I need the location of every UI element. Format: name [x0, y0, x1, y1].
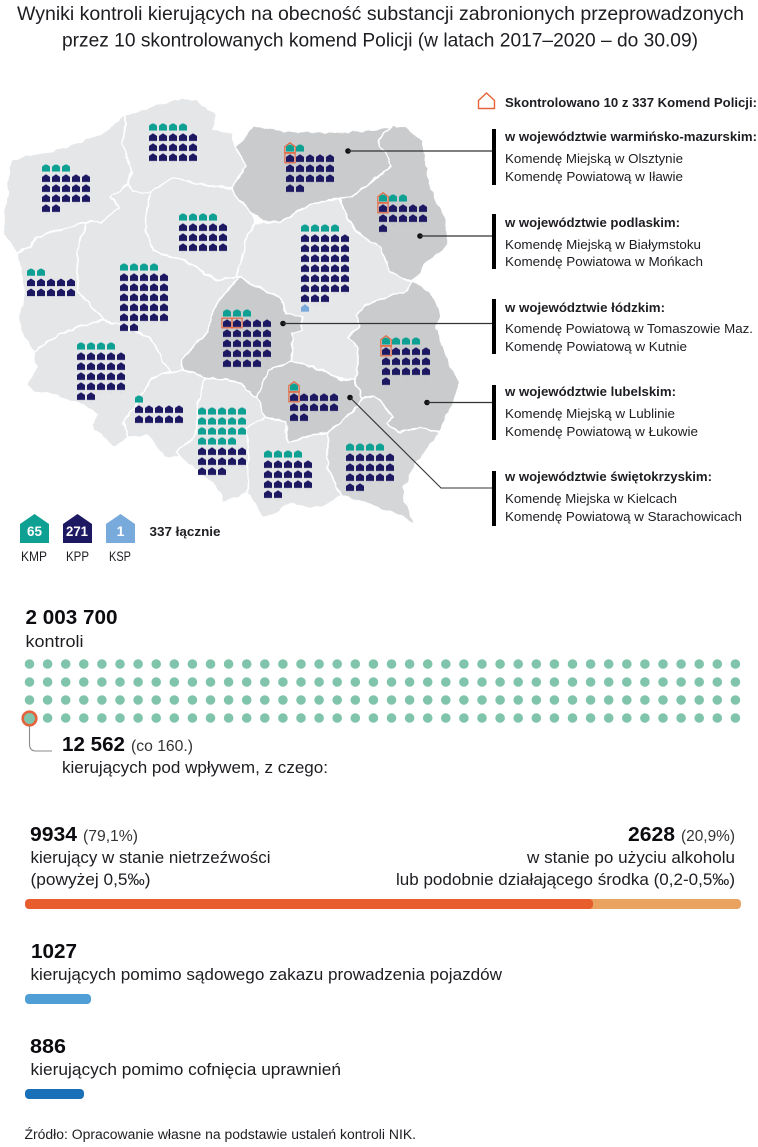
map of Poland: [3, 98, 460, 526]
region: opolskie: [123, 370, 207, 457]
icons: lubelskie: [381, 336, 432, 387]
legend: KSP: [106, 514, 135, 564]
stat: total checks: 2 003 700: [26, 607, 118, 629]
icons: podlaskie: [378, 193, 429, 234]
legend: KSP: 1: [117, 523, 125, 539]
stat: 2628: (20,9%): [681, 828, 735, 845]
icons: zachodniopomorskie: [42, 164, 92, 214]
region: podkarpackie: [328, 395, 440, 526]
controlled units heading: [478, 93, 757, 110]
stat: 1027: kierujących pomimo sądowego zakazu prowadzenia pojazdów: [30, 966, 502, 984]
stat: 1027: 1027: [31, 941, 77, 963]
legend: KPP: [63, 514, 92, 564]
panel: świętokrzyskie: [492, 470, 742, 526]
legend: total: 337 łącznie: [150, 524, 220, 539]
connector: podlaskie: [417, 233, 493, 239]
panel: łódzkie: Komendę Powiatową w Kutnie: [505, 340, 687, 354]
icons: łódzkie: [222, 309, 273, 369]
icons: świętokrzyskie: [289, 382, 340, 423]
bar: 1027: [25, 994, 91, 1004]
stat: 9934: 9934: [30, 824, 78, 846]
stat: drivers under influence: (co 160.): [131, 738, 193, 755]
icons: dolnośląskie: [77, 342, 127, 402]
panel: lubelskie: Komendę Powiatową w Łukowie: [505, 425, 698, 439]
panel: świętokrzyskie: Komendę Miejska w Kielcach: [505, 492, 677, 506]
panel: świętokrzyskie: w województwie świętokrzyskim:: [504, 470, 712, 484]
panel: warmińsko-mazurskie: Komendę Miejską w Olsztynie: [505, 152, 683, 166]
region: lubelskie: [348, 282, 460, 433]
stat: 1027: [30, 941, 502, 984]
panel: podlaskie: w województwie podlaskim:: [504, 216, 680, 230]
region: podlaskie: [340, 125, 448, 282]
icons: mazowieckie: [301, 224, 351, 314]
icon: orange house outline: [478, 93, 494, 108]
region: dolnośląskie: [25, 320, 170, 448]
map legend: [20, 514, 220, 564]
stat: 2628: w stanie po użyciu alkoholu: [526, 849, 735, 867]
bar: split 79.1 / 20.9: [25, 899, 741, 909]
panel: warmińsko-mazurskie: w województwie warmińsko-mazurskim:: [504, 130, 757, 144]
stat: drivers under influence: [62, 734, 328, 777]
panel: łódzkie: Komendę Powiatową w Tomaszowie Maz.: [505, 322, 753, 336]
stat: drivers under influence: kierujących pod wpływem, z czego:: [62, 759, 328, 777]
panel: podlaskie: Komendę Powiatowa w Mońkach: [505, 255, 703, 269]
panel: lubelskie: Komendę Miejską w Lublinie: [505, 407, 675, 421]
region: mazowieckie: [235, 198, 413, 380]
icons: wielkopolskie: [120, 263, 170, 333]
panel: łódzkie: w województwie łódzkim:: [504, 301, 665, 315]
region: warmińsko-mazurskie: [232, 127, 392, 222]
stat: 9934: [30, 824, 270, 889]
title: [17, 3, 744, 52]
stat: 2628: lub podobnie działającego środka (0,2-0,5‰): [396, 871, 735, 889]
region: zachodniopomorskie: [3, 115, 132, 253]
stat: 886: kierujących pomimo cofnięcia uprawnień: [30, 1061, 341, 1079]
stat: 886: 886: [30, 1036, 66, 1058]
panel: warmińsko-mazurskie: Komendę Powiatową w Iławie: [505, 170, 683, 184]
stat: total checks: kontroli: [26, 633, 84, 651]
connector: świętokrzyskie: [347, 395, 493, 488]
stat: 9934: (powyżej 0,5‰): [30, 871, 150, 889]
stat: 2628: 2628: [628, 824, 675, 846]
stat: 9934: (79,1%): [83, 828, 138, 845]
title: przez 10 skontrolowanych komend Policji (w latach 2017–2020 – do 30.09): [62, 30, 698, 52]
highlighted dot with connector: [23, 712, 52, 751]
icons: opolskie: [135, 395, 185, 425]
region: świętokrzyskie: [257, 360, 362, 442]
icons: warmińsko-mazurskie: [285, 143, 336, 194]
region: lubuskie: [18, 222, 103, 352]
legend: KMP: 65: [27, 523, 42, 539]
dot grid: [30, 664, 737, 718]
region: małopolskie: [247, 417, 342, 517]
icons: małopolskie: [264, 450, 314, 500]
legend: KPP: KPP: [66, 548, 89, 564]
region: kujawsko-pomorskie: [145, 178, 255, 280]
region: śląskie: [177, 378, 265, 502]
legend: KMP: KMP: [21, 548, 47, 564]
panel: lubelskie: w województwie lubelskim:: [504, 385, 676, 399]
stat: 9934: kierujący w stanie nietrzeźwości: [30, 849, 270, 867]
panel: warmińsko-mazurskie: [492, 129, 757, 185]
connector: lubelskie: [424, 400, 493, 405]
region: łódzkie: [182, 277, 302, 397]
title: Wyniki kontroli kierujących na obecność substancji zabronionych przeprowadzonych: [17, 3, 744, 25]
icons: śląskie: [198, 407, 248, 477]
panel: podlaskie: Komendę Miejską w Białymstoku: [505, 238, 701, 252]
source note: Źródło: Opracowanie własne na podstawie ustaleń kontroli NIK.: [24, 1127, 416, 1142]
icons: lubuskie: [27, 268, 77, 298]
icons: kujawsko-pomorskie: [179, 213, 229, 253]
legend: KSP: KSP: [109, 548, 131, 564]
region: pomorskie: [122, 98, 247, 193]
icons: pomorskie: [149, 123, 199, 163]
stat: 2628: [396, 824, 735, 889]
panel: lubelskie: [492, 385, 698, 440]
icons: podkarpackie: [346, 443, 396, 493]
panel: świętokrzyskie: Komendę Powiatową w Starachowicach: [505, 510, 742, 524]
stat: 886: [30, 1036, 341, 1079]
stat: drivers under influence: 12 562: [62, 734, 125, 756]
legend: KPP: 271: [66, 523, 88, 539]
region: wielkopolskie: [77, 185, 240, 372]
heading text: Skontrolowano 10 z 337 Komend Policji:: [505, 96, 757, 110]
connector: warmińsko-mazurskie: [345, 148, 493, 154]
stat: total checks: [26, 607, 118, 651]
connector: łódzkie: [280, 321, 493, 326]
panel: łódzkie: [492, 299, 753, 354]
panel: podlaskie: [492, 214, 703, 269]
bar: 886: [25, 1089, 84, 1099]
legend: KMP: [20, 514, 49, 564]
